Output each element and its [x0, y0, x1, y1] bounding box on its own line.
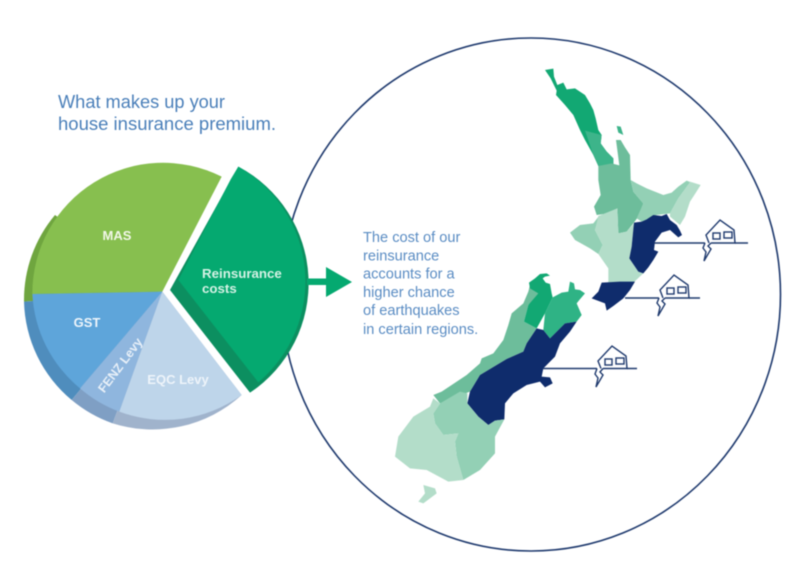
map: South Island — [395, 273, 585, 503]
title — [58, 92, 276, 134]
explanatory text — [363, 230, 478, 338]
label: Reinsurance costs — [202, 266, 282, 296]
arrow — [307, 267, 352, 297]
map: North Island — [545, 69, 701, 311]
explanatory text: in certain regions. — [363, 322, 478, 338]
title: house insurance premium. — [58, 114, 276, 134]
icon: house with crack, Wellington — [625, 275, 700, 316]
label: MAS: MAS — [103, 228, 132, 243]
explanatory text: accounts for a — [363, 266, 456, 282]
pie base slices — [24, 163, 242, 429]
label: FENZ Levy: FENZ Levy — [95, 335, 145, 395]
pie chart — [24, 163, 309, 429]
explanatory text: The cost of our — [363, 230, 460, 246]
icon: house with crack, Canterbury — [543, 346, 637, 387]
title: What makes up your — [58, 92, 225, 112]
explanatory text: of earthquakes — [363, 303, 460, 319]
magnifier circle — [282, 38, 780, 551]
explanatory text: reinsurance — [363, 248, 439, 264]
icon: house with crack, North Island east — [654, 220, 748, 261]
label: EQC Levy: EQC Levy — [147, 372, 209, 387]
label: Reinsurance costs: costs — [202, 281, 237, 296]
label: GST: GST — [74, 315, 100, 330]
reinsurance slice — [170, 167, 309, 393]
label: Reinsurance costs: Reinsurance — [202, 266, 282, 281]
explanatory text: higher chance — [363, 285, 455, 301]
